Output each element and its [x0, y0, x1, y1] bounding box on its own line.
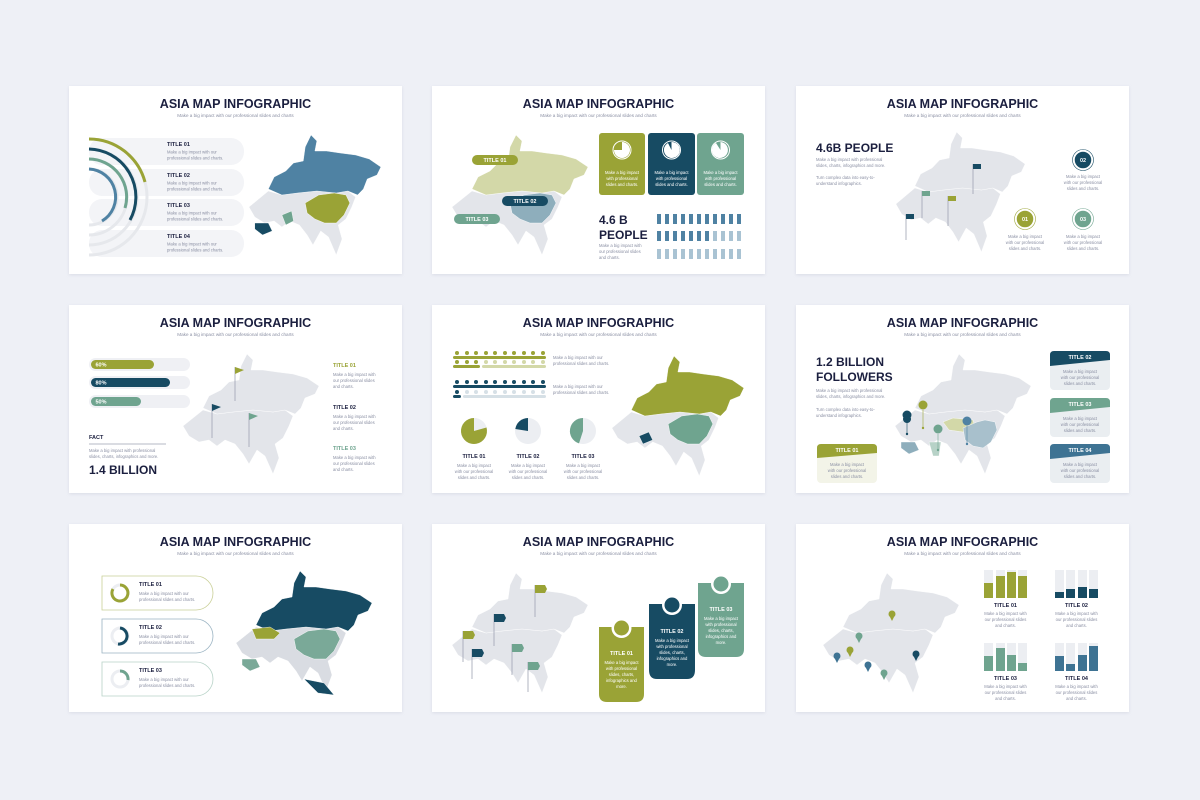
circle 01: 01 — [1022, 217, 1028, 223]
card 01 — [102, 576, 213, 610]
people grid dark: Make a big impact with our — [553, 384, 603, 389]
tab 01: more. — [616, 684, 627, 689]
card 03: TITLE 03 — [139, 668, 162, 674]
pie 02: Make a big impact — [511, 463, 546, 468]
card title 02: TITLE 02 — [1069, 355, 1091, 361]
titles right: and charts. — [333, 467, 354, 472]
titles right: TITLE 01 — [333, 363, 356, 369]
stat text: FOLLOWERS — [816, 370, 893, 384]
pie 01: TITLE 01 — [463, 454, 485, 460]
map — [236, 571, 372, 695]
4.6 B people stat: Make a big impact with — [599, 243, 642, 248]
stat text: understand infographics. — [816, 181, 862, 186]
pie 03 — [564, 418, 602, 480]
slide 2: boxes and people — [432, 86, 765, 274]
pins — [902, 400, 972, 451]
subtitle: Make a big impact with our professional slides and charts — [540, 113, 657, 118]
bar chart 04 — [1055, 643, 1098, 701]
titles right: Make a big impact with — [333, 414, 376, 419]
tab 02: with professional — [656, 644, 688, 649]
fact block: FACT — [89, 435, 104, 441]
subtitle: Make a big impact with our professional slides and charts — [904, 551, 1021, 556]
card 02: Make a big impact with our — [139, 634, 189, 639]
circle 02: slides and charts. — [1067, 186, 1099, 191]
4.6 B people stat — [599, 213, 648, 260]
bar chart 02: our professional slides — [1056, 617, 1097, 622]
map — [452, 573, 588, 693]
pills list: TITLE 04 — [167, 234, 191, 240]
stat text — [816, 355, 893, 418]
map — [452, 135, 588, 255]
titles right: Make a big impact with — [333, 372, 376, 377]
stat boxes: slides and charts. — [655, 182, 688, 187]
card title 03 — [1050, 398, 1110, 437]
tab 02 — [649, 595, 695, 679]
subtitle: Make a big impact with our professional slides and charts — [177, 551, 294, 556]
slide 7: donut cards — [69, 524, 402, 712]
title: ASIA MAP INFOGRAPHIC — [523, 316, 674, 330]
pills list: professional slides and charts. — [167, 216, 223, 222]
tab 01: with professional — [606, 666, 637, 671]
stat text: 1.2 BILLION — [816, 355, 884, 369]
subtitle: Make a big impact with our professional slides and charts — [177, 332, 294, 337]
pills list: professional slides and charts. — [167, 248, 223, 252]
pie 01 — [455, 418, 493, 480]
pie 03: with our professional — [564, 469, 602, 474]
bar chart 02: Make a big impact with — [1055, 611, 1098, 616]
card title 03: with our professional — [1061, 422, 1099, 427]
tab 01: TITLE 01 — [610, 651, 633, 657]
4.6 B people stat: our professional slides — [599, 249, 641, 254]
titles right: Make a big impact with — [333, 455, 376, 460]
card 01: TITLE 01 — [139, 582, 162, 588]
bar chart 03: Make a big impact with — [984, 684, 1027, 689]
bar chart 02: and charts. — [1066, 623, 1087, 628]
pie 01: with our professional — [455, 469, 493, 474]
people grid olive: professional slides and charts. — [553, 361, 609, 366]
circle 03: with our professional — [1064, 240, 1102, 245]
stat text: slides, charts, infographics and more. — [816, 394, 885, 399]
card title 01: TITLE 01 — [836, 448, 858, 454]
titles right: and charts. — [333, 384, 354, 389]
tab 01: infographics and — [606, 678, 638, 683]
subtitle: Make a big impact with our professional slides and charts — [904, 113, 1021, 118]
titles right: our professional slides — [333, 378, 375, 383]
people grid dark — [453, 380, 609, 398]
card title 01: with our professional — [828, 468, 866, 473]
stat boxes: with professional — [656, 176, 687, 181]
card title 04: TITLE 04 — [1069, 448, 1092, 454]
tab 02: slides, charts, — [659, 650, 685, 655]
bar chart 01: and charts. — [995, 623, 1016, 628]
subtitle: Make a big impact with our professional slides and charts — [540, 551, 657, 556]
progress bars — [89, 358, 190, 408]
titles right: TITLE 02 — [333, 405, 356, 411]
card title 01 — [817, 444, 877, 483]
pins — [834, 610, 920, 680]
map labels — [454, 155, 548, 224]
flags — [906, 164, 981, 240]
circle 03: Make a big impact — [1066, 234, 1101, 239]
bar chart 02 — [1055, 570, 1098, 628]
card title 01: slides and charts. — [831, 474, 863, 479]
card title 04 — [1050, 444, 1110, 483]
title: ASIA MAP INFOGRAPHIC — [887, 97, 1038, 111]
circle 01: Make a big impact — [1008, 234, 1043, 239]
4.6 B people stat: 4.6 B — [599, 213, 628, 227]
card title 04: with our professional — [1061, 468, 1099, 473]
title: ASIA MAP INFOGRAPHIC — [523, 97, 674, 111]
bar chart 03: and charts. — [995, 696, 1016, 701]
card title 03: slides and charts. — [1064, 428, 1096, 433]
slide 5: people grid and pies — [432, 305, 765, 493]
pie 03: slides and charts. — [567, 475, 599, 480]
circle 02: Make a big impact — [1066, 174, 1101, 179]
map labels: TITLE 01 — [484, 158, 506, 164]
people grid dark: professional slides and charts. — [553, 390, 609, 395]
map — [249, 135, 381, 255]
card title 02: slides and charts. — [1064, 381, 1096, 386]
stat boxes: with professional — [606, 176, 638, 181]
tab 03: slides, charts, — [708, 628, 734, 633]
card title 04: slides and charts. — [1064, 474, 1096, 479]
tab 01: slides, charts, — [609, 672, 634, 677]
tab 03 — [698, 574, 744, 657]
map — [895, 354, 1031, 474]
pie 03: TITLE 03 — [572, 454, 594, 460]
stat text: Turn complex data into easy-to- — [816, 407, 875, 412]
card 02 — [102, 619, 213, 653]
stat boxes: Make a big impact — [704, 170, 738, 175]
title: ASIA MAP INFOGRAPHIC — [160, 535, 311, 549]
tab 02: Make a big impact — [655, 638, 690, 643]
card 03: Make a big impact with our — [139, 677, 189, 682]
map — [612, 356, 744, 476]
card title 04: Make a big impact — [1063, 462, 1098, 467]
arc chart — [89, 139, 147, 255]
pie 02: slides and charts. — [512, 475, 544, 480]
stat text: Turn complex data into easy-to- — [816, 175, 875, 180]
tab 02: infographics and — [657, 656, 688, 661]
people icon grid — [657, 214, 741, 259]
tab 03: Make a big impact — [704, 616, 739, 621]
circle 02 — [1064, 150, 1102, 191]
pills list: professional slides and charts. — [167, 156, 223, 160]
title: ASIA MAP INFOGRAPHIC — [523, 535, 674, 549]
circle 03: 03 — [1080, 217, 1086, 223]
map — [183, 354, 319, 474]
pills list — [89, 138, 244, 257]
pills list: Make a big impact with our — [167, 242, 217, 246]
circle 02: with our professional — [1064, 180, 1102, 185]
titles right: TITLE 03 — [333, 446, 356, 452]
title: ASIA MAP INFOGRAPHIC — [160, 316, 311, 330]
card title 01: Make a big impact — [830, 462, 865, 467]
titles right: and charts. — [333, 426, 354, 431]
card title 02: Make a big impact — [1063, 369, 1098, 374]
circle 01: with our professional — [1006, 240, 1044, 245]
stat text: understand infographics. — [816, 413, 862, 418]
stat boxes — [599, 133, 744, 195]
tab 01 — [599, 618, 644, 702]
fact block — [89, 435, 166, 477]
tab 03: with professional — [705, 622, 737, 627]
card title 03: TITLE 03 — [1069, 402, 1091, 408]
tab 01: Make a big impact — [605, 660, 639, 665]
stat boxes: slides and charts. — [704, 182, 737, 187]
pills list: TITLE 03 — [167, 203, 190, 209]
pills list: Make a big impact with our — [167, 150, 217, 154]
fact block: 1.4 BILLION — [89, 463, 157, 477]
card 02: TITLE 02 — [139, 625, 162, 631]
tab 02: TITLE 02 — [661, 629, 683, 635]
flags — [463, 585, 547, 692]
pills list: Make a big impact with our — [167, 180, 217, 186]
circle 03: slides and charts. — [1067, 246, 1099, 251]
circle 02: 02 — [1080, 158, 1086, 164]
slide 4: progress bars — [69, 305, 402, 493]
pills list: TITLE 02 — [167, 173, 190, 179]
stat boxes: with professional — [705, 176, 736, 181]
stat text — [816, 141, 893, 186]
progress bars: 80% — [95, 380, 107, 386]
titles right — [333, 363, 376, 472]
stat text: 4.6B PEOPLE — [816, 141, 893, 155]
pills list: professional slides and charts. — [167, 186, 223, 192]
stat boxes: Make a big impact — [605, 170, 640, 175]
bar chart 03: our professional slides — [985, 690, 1026, 695]
card 01: Make a big impact with our — [139, 591, 189, 596]
stat text: Make a big impact with professional — [816, 388, 882, 393]
pie 02: with our professional — [509, 469, 547, 474]
fact block: slides, charts, infographics and more. — [89, 454, 158, 459]
slide 1: arcs and titles — [69, 86, 402, 274]
subtitle: Make a big impact with our professional slides and charts — [177, 113, 294, 118]
people grid olive — [453, 351, 609, 368]
stat boxes: Make a big impact — [655, 170, 689, 175]
card 02: professional slides and charts. — [139, 640, 195, 645]
bar chart 01: our professional slides — [985, 617, 1026, 622]
pie 02 — [509, 418, 547, 480]
people grid olive: Make a big impact with our — [553, 355, 603, 360]
card title 03: Make a big impact — [1063, 416, 1098, 421]
stat boxes: slides and charts. — [606, 182, 638, 187]
bar chart 01: Make a big impact with — [984, 611, 1027, 616]
bar chart 04: TITLE 04 — [1065, 676, 1089, 682]
pills list: Make a big impact with our — [167, 210, 217, 216]
circle 03 — [1064, 208, 1102, 251]
bar chart 01: TITLE 01 — [994, 603, 1017, 609]
title: ASIA MAP INFOGRAPHIC — [160, 97, 311, 111]
titles right: our professional slides — [333, 461, 375, 466]
slide 9: bar charts — [796, 524, 1129, 712]
4.6 B people stat: and charts. — [599, 255, 620, 260]
title: ASIA MAP INFOGRAPHIC — [887, 535, 1038, 549]
tab 03: TITLE 03 — [710, 607, 732, 613]
circle 01 — [1006, 208, 1044, 251]
tab 02: more. — [667, 662, 677, 667]
bar chart 03: TITLE 03 — [994, 676, 1017, 682]
4.6 B people stat: PEOPLE — [599, 228, 648, 242]
slide 3: flags and circles — [796, 86, 1129, 274]
card 03 — [102, 662, 213, 696]
map labels: TITLE 03 — [466, 217, 488, 223]
tab 03: more. — [716, 640, 726, 645]
pie 01: Make a big impact — [457, 463, 492, 468]
fact block: Make a big impact with professional — [89, 448, 155, 453]
bar chart 01 — [984, 570, 1027, 628]
card 01: professional slides and charts. — [139, 597, 195, 602]
card title 02 — [1050, 351, 1110, 390]
titles right: our professional slides — [333, 420, 375, 425]
slide 8: flags and tabs — [432, 524, 765, 712]
card title 02: with our professional — [1061, 375, 1099, 380]
slide 6: pins and title cards — [796, 305, 1129, 493]
stat text: Make a big impact with professional — [816, 157, 882, 162]
bar chart 03 — [984, 643, 1027, 701]
circle 01: slides and charts. — [1009, 246, 1041, 251]
bar chart 02: TITLE 02 — [1065, 603, 1088, 609]
bar chart 04: our professional slides — [1056, 690, 1097, 695]
stat text: slides, charts, infographics and more. — [816, 163, 885, 168]
subtitle: Make a big impact with our professional slides and charts — [904, 332, 1021, 337]
bar chart 04: and charts. — [1066, 696, 1087, 701]
map labels: TITLE 02 — [514, 199, 536, 205]
progress bars: 60% — [95, 362, 107, 368]
pie 02: TITLE 02 — [517, 454, 539, 460]
title: ASIA MAP INFOGRAPHIC — [887, 316, 1038, 330]
pie 01: slides and charts. — [458, 475, 490, 480]
progress bars: 50% — [95, 400, 107, 406]
subtitle: Make a big impact with our professional slides and charts — [540, 332, 657, 337]
tab 03: infographics and — [706, 634, 737, 639]
pills list: TITLE 01 — [167, 142, 190, 148]
card 03: professional slides and charts. — [139, 683, 195, 688]
map — [823, 573, 959, 693]
flags — [212, 367, 258, 447]
map — [896, 132, 1025, 252]
pie 03: Make a big impact — [566, 463, 601, 468]
bar chart 04: Make a big impact with — [1055, 684, 1098, 689]
